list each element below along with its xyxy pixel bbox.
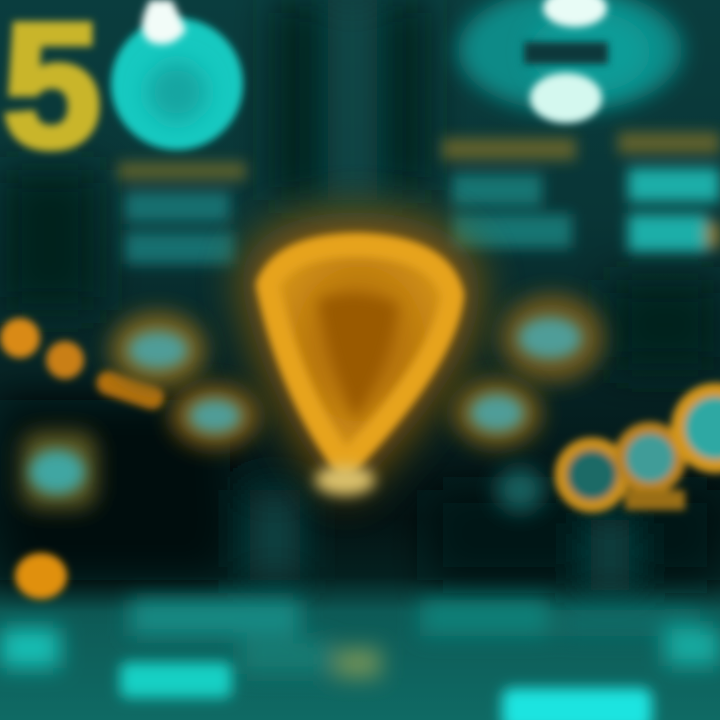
text block: upper left: [118, 162, 246, 264]
icon: teal ring top right: [458, 0, 682, 123]
icon: orange dot lower left: [15, 553, 67, 599]
node: far left badge: [22, 432, 96, 508]
node: left upper badge: [110, 312, 206, 388]
connector nodes: left chain: [0, 318, 167, 412]
node: small dim teal dot: [496, 468, 544, 512]
node: left lower badge: [171, 384, 259, 448]
text block: upper far right: [618, 132, 720, 252]
node: right upper badge: [500, 294, 604, 382]
central shield icon: [240, 212, 480, 500]
icon: teal circle with white drop: [111, 0, 243, 150]
text block: upper centre right: [442, 138, 576, 248]
floor panel: glowing teal tiles: [0, 600, 720, 720]
ring cluster: lower right: [561, 390, 720, 510]
node: right lower badge: [453, 379, 541, 447]
